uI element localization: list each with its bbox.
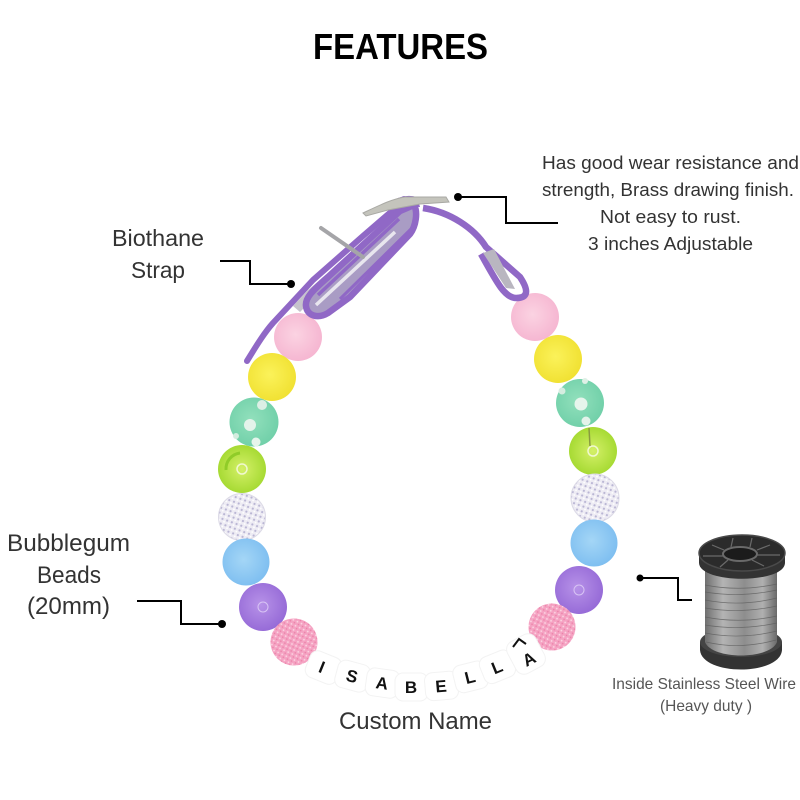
bead: pale pink right: [511, 293, 559, 341]
bead: blue left: [222, 538, 270, 586]
text: hardware description: strength, Brass drawing finish.: [542, 179, 794, 200]
letters: L: [489, 657, 506, 678]
spool top flange: [699, 553, 785, 579]
text: Bubblegum Beads label: Bubblegum: [7, 530, 130, 557]
spool bottom flange: [700, 642, 782, 670]
bead: yellow left: [248, 353, 296, 401]
text: Biothane Strap label: [112, 225, 204, 283]
text: Custom Name label: Custom Name: [339, 708, 492, 735]
bead: mint polka left: [230, 398, 278, 446]
strap: buckle ring: [363, 197, 449, 216]
bead: lime glitter left: [218, 445, 266, 493]
bead: yellow right: [534, 335, 582, 383]
text: hardware description: Not easy to rust.: [600, 206, 741, 227]
bead: pale pink left: [274, 313, 322, 361]
strap: grey underside: [293, 218, 398, 312]
strap: doubled loop: [306, 205, 416, 316]
text: Bubblegum Beads label: Beads: [37, 562, 101, 589]
letters: A: [519, 648, 539, 671]
bead: purple right: [555, 566, 603, 614]
arrow: strap leader line: [220, 261, 295, 288]
icon: collar strap and buckle: [247, 196, 526, 361]
title: FEATURES: [313, 26, 488, 67]
bead: blue right: [570, 520, 618, 566]
letters: B: [405, 678, 417, 697]
white cubes: [303, 631, 549, 701]
text: wire label: [612, 676, 796, 715]
spool wire body: [705, 570, 777, 656]
bead: mint polka right: [556, 378, 604, 427]
arrow: hardware leader line: [454, 193, 558, 223]
text: Bubblegum Beads label: [7, 530, 130, 620]
letters: I: [316, 658, 328, 677]
strap: right tail: [423, 208, 526, 298]
letter beads: ISABELLA: [303, 631, 549, 701]
letters: A: [375, 673, 389, 694]
strap: buckle prong: [321, 228, 363, 257]
beads: left strand: [218, 313, 322, 666]
text: wire label: Inside Stainless Steel Wire: [612, 676, 796, 693]
text: Biothane Strap label: Biothane: [112, 225, 204, 251]
arrow: beads leader line: [137, 601, 226, 628]
text: hardware description: Has good wear resistance and: [542, 152, 799, 173]
icon: wire spool: [699, 535, 785, 670]
letters: [316, 648, 539, 697]
bead: white sparkle right: [571, 474, 619, 522]
text: hardware description: [542, 152, 799, 254]
bead: rose sparkle left: [270, 618, 318, 666]
beads: right strand: [511, 293, 619, 650]
arrow: wire leader line: [636, 574, 692, 600]
text: Bubblegum Beads label: (20mm): [27, 593, 110, 620]
strap: long outer tail: [247, 199, 404, 361]
letters: E: [435, 677, 448, 696]
bead: lime glitter right: [569, 427, 617, 475]
bead: white sparkle left: [218, 494, 266, 540]
text: Biothane Strap label: Strap: [131, 257, 185, 283]
letters: S: [344, 666, 360, 687]
letters: L: [463, 667, 477, 688]
bead: purple left: [239, 583, 287, 631]
text: wire label: (Heavy duty ): [660, 698, 752, 715]
text: hardware description: 3 inches Adjustable: [588, 233, 753, 254]
bead: rose sparkle right: [528, 604, 576, 650]
